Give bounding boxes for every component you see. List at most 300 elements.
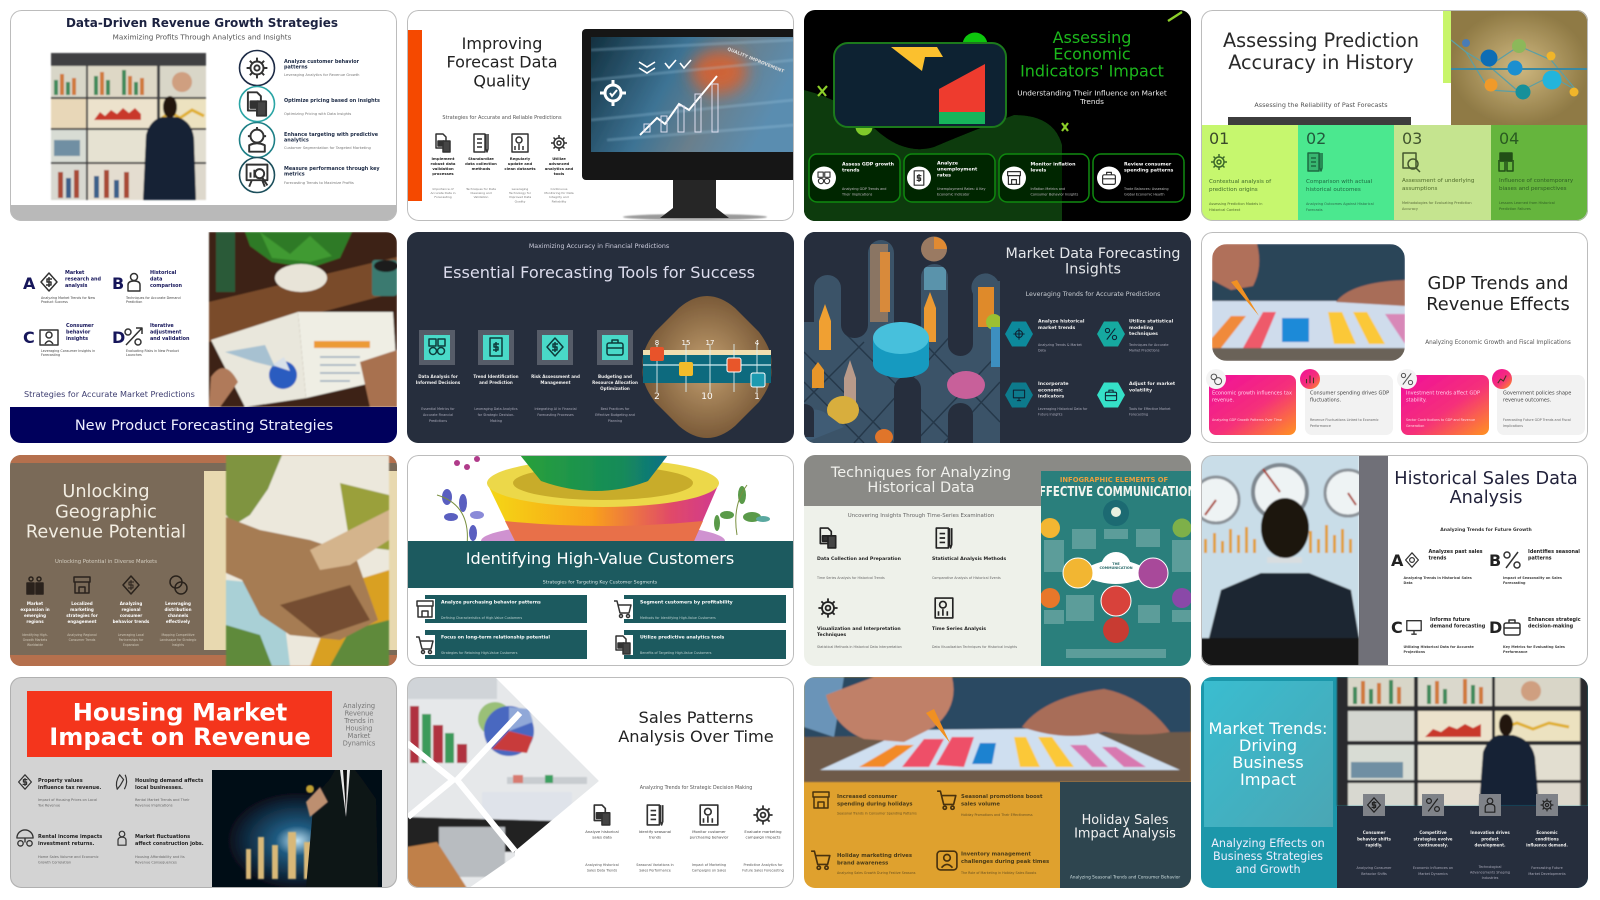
step labels: Standardize (468, 156, 494, 161)
item D: Performance (1503, 650, 1528, 654)
market notes: Worldwide (27, 643, 43, 647)
effect card 4: Government policies shape (1503, 390, 1571, 396)
indicator card 2 (904, 154, 995, 202)
title: Sales Patterns (639, 708, 753, 727)
hexagon photo: timeline on wood: 17 (706, 339, 714, 347)
action labels: Evaluate marketing (744, 829, 782, 834)
side subtitle: Trends in (343, 717, 374, 725)
column 03: 03 (1402, 129, 1422, 148)
column 01: 01 (1209, 129, 1229, 148)
step notes: Leveraging (512, 187, 528, 191)
title band: Identifying High-Value Customers (466, 549, 734, 568)
photo: handshake over world map (226, 455, 389, 666)
step notes: Validation (474, 195, 488, 199)
title tile: Business (1232, 753, 1304, 772)
side subtitle: Dynamics (343, 740, 376, 748)
item D: decision-making (1528, 624, 1574, 630)
item B (112, 270, 183, 304)
tool 2: and Prediction (479, 380, 513, 385)
icon: coins badge (1206, 369, 1226, 389)
panel: New Product Forecasting Strategies (10, 232, 398, 443)
insight 2 (1097, 318, 1174, 352)
photo: analyst facing chart wall (1337, 677, 1588, 806)
divider strip (1359, 455, 1388, 666)
icon: document dollar (907, 166, 931, 190)
icon: percent (1504, 552, 1520, 568)
title: Analysis (1450, 488, 1522, 508)
step labels: clean datasets (504, 166, 536, 171)
method 4: Time Series Analysis (932, 626, 986, 632)
title: Assessing (1053, 28, 1131, 47)
market notes: Partnerships for (119, 638, 144, 642)
tool 1: Essential Metrics for (421, 407, 455, 411)
action labels: sales data (592, 834, 612, 839)
holiday item 2: Seasonal promotions boost (961, 794, 1042, 800)
indicator card 3: Inflation Metrics and (1030, 187, 1065, 191)
icon: window chart (935, 598, 953, 618)
item A: Data (1404, 581, 1413, 585)
item D: Launches (126, 353, 142, 357)
market labels: strategies for (66, 613, 98, 618)
item A: A (23, 274, 36, 293)
list item 2: Optimize pricing based on insights (284, 98, 380, 104)
title: Quality (473, 71, 531, 90)
effect card 4: Forecasting Future GDP Trends and Fiscal (1503, 418, 1571, 422)
effect 4 (118, 831, 204, 864)
item C: C (23, 328, 35, 347)
photo: businessman with glowing city (212, 770, 382, 888)
indicator card 2: Unemployment Rates: A Key (937, 187, 985, 191)
icon: cart (613, 599, 633, 619)
tool 3: Management (540, 380, 571, 385)
icon tile: percent (1422, 794, 1444, 816)
item B: B (1489, 551, 1501, 570)
icon: dollar diamond (41, 273, 57, 291)
effect 3: Rental income impacts (38, 834, 102, 840)
item A (23, 270, 102, 304)
list item 3 (240, 122, 379, 158)
method 4 (932, 598, 1017, 649)
step notes: Techniques for Data (466, 187, 496, 191)
subtitle: Analyzing Trends for Strategic Decision Making (640, 785, 752, 791)
list item 2: Optimizing Pricing with Data Insights (284, 112, 351, 116)
subtitle: Strategies for Accurate and Reliable Predictions (442, 115, 562, 121)
market labels: engagement (67, 619, 97, 624)
item A: research and (65, 277, 102, 283)
subtitle: Analyzing Effects on (1211, 837, 1325, 850)
item C: demand forecasting (1430, 624, 1486, 630)
panel: Techniques for Analyzing Historical Data (804, 455, 1196, 666)
icon tile: person (1479, 794, 1501, 816)
hexagon photo: timeline on wood: 15 (682, 339, 690, 347)
icon: store (74, 577, 90, 593)
item B: Forecasting (1503, 581, 1526, 585)
subtitle: and Growth (1235, 863, 1301, 876)
title: Assessing Prediction (1223, 29, 1419, 52)
icon: document (436, 134, 450, 152)
method 1: Time Series Analysis for Historical Trends (816, 576, 885, 580)
market notes: Expansion (123, 643, 139, 647)
method 3: Statistical Methods in Historical Data Interpretation (817, 645, 902, 649)
title panel: Analyzing Seasonal Trends and Consumer Behavior (1070, 874, 1180, 880)
effect 2: Rental Market Trends and Their (135, 798, 190, 802)
indicator card 4: Review consumer (1124, 162, 1171, 168)
market labels: marketing (70, 607, 94, 612)
trend column 3: Technological (1479, 865, 1501, 869)
panel: Improving Forecast Data Quality (407, 10, 802, 221)
column 01 (1201, 125, 1298, 221)
sparkle marks (818, 12, 1182, 131)
icon: briefcase (1504, 620, 1520, 635)
trend column 1: Analyzing Consumer (1357, 866, 1391, 870)
tool 2: Leveraging Data Analytics (474, 407, 518, 411)
tool 3: Integrating AI in Financial (534, 407, 577, 411)
customer strategy 1: Defining Characteristics of High-Value Customers (441, 616, 522, 620)
item B: Impact of Seasonality on Sales (1503, 576, 1562, 580)
indicator card 4: Global Economic Health (1124, 193, 1165, 197)
trend column 4: Economic (1536, 830, 1558, 835)
photo: monitor: QUALITY IMPROVEMENT (726, 46, 786, 75)
action notes: Sales Performance (639, 868, 671, 872)
item B: data (150, 277, 162, 283)
trend column 2 (1413, 794, 1453, 876)
item B: Prediction (126, 300, 142, 304)
effect 4: Housing Affordability and Its (135, 855, 185, 859)
title band (10, 407, 397, 443)
title: Unlocking (62, 482, 150, 502)
embedded infographic: effective communication: COMMUNICATION (1099, 566, 1133, 570)
icon: teal hexagon percent (1097, 322, 1125, 346)
market notes: Leveraging Local (118, 633, 144, 637)
icon: briefcase (607, 340, 623, 355)
tool 3 (531, 330, 580, 417)
subtitle: Business Strategies (1213, 850, 1323, 863)
list item 3: Enhance targeting with predictive (284, 132, 378, 138)
method 1 (816, 528, 901, 580)
decorative green blob (804, 90, 1062, 221)
tool 3: Risk Assessment and (531, 374, 580, 379)
holiday item 1: spending during holidays (837, 802, 913, 808)
indicator card 4: Trade Balances: Assessing (1124, 187, 1169, 191)
item C: Leveraging Consumer Insights in (41, 349, 95, 353)
market labels: expansion in (20, 607, 50, 612)
customer strategy 3: Focus on long-term relationship potential (441, 634, 550, 640)
item B: Techniques for Accurate Demand (126, 296, 181, 300)
list item 4: metrics (284, 172, 305, 178)
step notes: Accurate Data in (430, 191, 456, 195)
step labels: data collection (465, 161, 497, 166)
market notes: Mapping Competitive (161, 633, 195, 637)
icon: gear person (1406, 553, 1418, 567)
list item 1: patterns (284, 65, 308, 71)
action labels: Monitor customer (692, 829, 726, 834)
holiday item 3: Analyzing Sales Growth During Festive Seasons (837, 871, 916, 875)
subtitle: Maximizing Profits Through Analytics and Insights (113, 32, 292, 42)
tool 1: Predictions (429, 419, 447, 423)
effect 3: Home Sales Volume and Economic (38, 855, 99, 859)
column 03 (1394, 125, 1491, 221)
hexagon photo: timeline on wood: 8 (655, 339, 659, 347)
icon: cart (811, 851, 830, 869)
list item 1: Analyze customer behavior (284, 59, 359, 65)
subtitle: Unlocking Potential in Diverse Markets (55, 559, 157, 565)
indicator card 1 (809, 154, 900, 202)
subtitle: Understanding Their Influence on Market (1017, 88, 1167, 98)
title box: Impact on Revenue (49, 723, 311, 751)
action labels: Analyze historical (585, 829, 619, 834)
icon: document and calculator (240, 86, 274, 122)
item B: B (112, 274, 124, 293)
title tile (1204, 681, 1333, 827)
step notes: Integrity and (549, 195, 569, 199)
title: Revenue Effects (1426, 294, 1570, 315)
item D: Key Metrics for Evaluating Sales (1503, 645, 1565, 649)
photo: 3D market objects seen through pill cut-outs (804, 232, 1002, 445)
market notes: Growth Markets (23, 638, 48, 642)
insight 3 (1005, 381, 1088, 416)
icon: people group (27, 577, 43, 594)
tool 4: Optimization (600, 386, 630, 391)
icon: document (820, 528, 836, 548)
tool 4: Resource Allocation (592, 380, 638, 385)
effect 1: influence tax revenue. (38, 785, 101, 791)
insight 4: Tools for Effective Market (1129, 407, 1171, 411)
hexagon photo: timeline on wood: 1 (754, 392, 760, 402)
icon: percent badge (1397, 369, 1417, 389)
trend column 3: product (1481, 836, 1499, 841)
holiday item 2 (937, 791, 1043, 817)
item C: Projections (1404, 650, 1425, 654)
icon: cart (937, 791, 956, 809)
item D: adjustment (150, 330, 182, 336)
column 01: Contextual analysis of (1209, 179, 1271, 185)
title: Insights (1065, 261, 1121, 277)
tool 2 (473, 330, 519, 423)
market labels: Analyzing (120, 601, 142, 606)
action labels: campaign impacts (746, 834, 781, 839)
item C: Forecasting (41, 353, 60, 357)
trend column 1: Behavior Shifts (1361, 872, 1387, 876)
accent bar (407, 30, 422, 201)
market labels: Localized (71, 601, 93, 606)
bottom band (10, 655, 397, 666)
market labels: consumer (120, 613, 142, 618)
icon: umbrella (17, 830, 33, 846)
market labels: channels (168, 613, 189, 618)
effect card 2: Revenue Fluctuations Linked to Economic (1310, 418, 1379, 422)
indicator card 3 (999, 154, 1089, 202)
item D (112, 323, 190, 357)
item A: analysis (65, 283, 88, 289)
effect 1: Property values (38, 778, 83, 784)
step labels: methods (472, 166, 491, 171)
column 04: Influence of contemporary (1499, 178, 1573, 184)
icon: briefcase (1097, 166, 1121, 190)
indicator card 2: unemployment (937, 166, 978, 172)
panel: Housing Market Impact on Revenue (10, 677, 397, 888)
title: Essential Forecasting Tools for Success (443, 263, 755, 282)
list item 4: Measure performance through key (284, 166, 380, 172)
action labels: purchasing behavior (690, 834, 729, 839)
effect 1 (19, 775, 101, 808)
step labels: validation (432, 166, 454, 171)
action labels: trends (649, 834, 661, 839)
insight 4 (1097, 381, 1176, 416)
item C: C (1391, 618, 1403, 637)
trend column 1: rapidly. (1366, 843, 1383, 848)
tool 4: Planning (608, 419, 622, 423)
icon: window chart (512, 134, 528, 152)
trend column 3: Industries (1482, 876, 1499, 880)
insight 4: volatility (1129, 387, 1152, 393)
column 02: 02 (1306, 129, 1326, 148)
side subtitle: Revenue (345, 710, 373, 718)
insight 1: Analyze historical (1038, 320, 1085, 324)
indicator card 2: rates (937, 172, 951, 178)
effect 3: investment returns. (38, 841, 94, 847)
icon: gear person (240, 122, 274, 158)
market notes: Insights (172, 643, 184, 647)
effect card 1: Economic growth influences tax (1212, 390, 1292, 396)
list item 4 (240, 158, 380, 192)
column 03: Methodologies for Evaluating Prediction (1402, 201, 1472, 205)
holiday item 3: Holiday marketing drives (837, 853, 912, 859)
insight 3: Leveraging Historical Data for (1038, 407, 1087, 411)
icon: notebook (936, 528, 952, 548)
step labels: update and (508, 161, 532, 166)
list item 1 (240, 50, 360, 86)
step notes: Monitoring for Data (544, 191, 574, 195)
item D (1489, 617, 1581, 654)
method 3: Visualization and Interpretation (817, 627, 901, 632)
subtitle: Analyzing Trends for Future Growth (1440, 527, 1532, 533)
item D: Enhances strategic (1528, 617, 1581, 623)
column 01: prediction origins (1209, 187, 1258, 193)
side subtitle: Market (348, 732, 371, 740)
indicator card 3: Monitor inflation (1030, 162, 1075, 168)
effect card 2: fluctuations. (1310, 398, 1341, 404)
trend column 2: strategies evolve (1413, 836, 1453, 841)
effect card 3: Investment trends affect GDP (1406, 390, 1480, 396)
icon tile: gear (1536, 794, 1558, 816)
tool 1: Informed Decisions (416, 380, 461, 385)
step labels: Regularly (510, 156, 530, 161)
insight 2: modeling (1129, 325, 1153, 331)
trend column 3: Advancements Shaping (1470, 870, 1510, 874)
trend column 4: conditions (1535, 836, 1559, 841)
column 01: Historical Context (1209, 208, 1241, 212)
item D: D (112, 328, 125, 347)
icon: store (1002, 166, 1026, 190)
effect card 3: Generation (1406, 424, 1424, 428)
icon row (436, 134, 567, 152)
step labels: advanced (549, 161, 570, 166)
column 03: Assessment of underlying (1402, 178, 1474, 184)
step notes: Quality (515, 199, 526, 203)
trend column 2: Competitive (1419, 830, 1447, 835)
dark footer panel (1337, 806, 1588, 888)
icon: gear head (240, 50, 274, 86)
footer bar (10, 205, 397, 221)
column 04: 04 (1499, 129, 1519, 148)
subtitle: Analyzing Economic Growth and Fiscal Implications (1425, 340, 1571, 346)
photo: monitor (582, 29, 802, 220)
customer strategy 2: Segment customers by profitability (640, 600, 733, 606)
effect 1: Impact of Housing Prices on Local (38, 798, 97, 802)
subtitle: Leveraging Trends for Accurate Predictions (1026, 291, 1160, 298)
item A: trends (1428, 556, 1447, 562)
icon: screen (1407, 621, 1421, 634)
tool 4: Effective Budgeting and (595, 413, 635, 417)
market labels: regional (121, 607, 141, 612)
icon: gear (551, 135, 567, 151)
market labels: regions (26, 619, 44, 624)
insight 3: Future Insights (1038, 412, 1063, 416)
side subtitle: Housing (346, 724, 372, 732)
trend column 4: Market Developments (1528, 872, 1566, 876)
action notes: Sales Data Trends (587, 868, 617, 872)
icon: magnifier report (1403, 153, 1420, 172)
indicator card 1: Analyzing GDP Trends and (842, 187, 886, 191)
effect 2 (116, 775, 203, 808)
holiday item 3 (811, 851, 916, 875)
holiday item 4 (937, 851, 1049, 875)
title: Market Data Forecasting (1006, 246, 1180, 262)
effect card 2: Performance (1310, 424, 1331, 428)
action labels: Identify seasonal (639, 829, 671, 834)
effect card 4: revenue outcomes. (1503, 398, 1552, 404)
icon: document (594, 805, 610, 825)
item C: Consumer (66, 323, 94, 329)
photo: hands over bar chart (804, 677, 1191, 782)
market labels: Leveraging (165, 601, 191, 606)
customer strategy 1 (415, 595, 587, 623)
holiday item 4: The Role of Marketing in Holiday Sales Boosts (960, 871, 1037, 875)
method 3 (817, 598, 902, 649)
item A: Analyzing Market Trends for New (41, 296, 95, 300)
indicator card 4 (1093, 154, 1184, 202)
trend column 1: behavior shifts (1357, 836, 1392, 841)
effect card 3 (1397, 369, 1489, 435)
title: Analysis Over Time (618, 727, 774, 746)
icon: presentation magnifier (240, 158, 274, 192)
action notes: Seasonal Variations in (636, 863, 674, 867)
item B: Identifies seasonal (1528, 549, 1580, 555)
photo: desk with notebook and plant (209, 232, 398, 407)
icon: gear (753, 805, 773, 825)
sales icons (594, 805, 773, 825)
hexagon photo: timeline on wood (642, 296, 772, 438)
trend column 3: development. (1474, 843, 1506, 848)
photo: dashboard monitor in diamond tiles (407, 677, 599, 888)
title band (804, 455, 1191, 506)
title band: Strategies for Targeting Key Customer Segments (543, 580, 658, 586)
market icons (27, 576, 187, 594)
insight 2: Market Predictions (1129, 348, 1160, 352)
icon: person frame (40, 330, 58, 345)
title: Forecast Data (446, 53, 558, 72)
tool 4: Best Practices for (601, 407, 629, 411)
holiday item 2: sales volume (961, 802, 1000, 808)
action labels (585, 829, 782, 839)
embedded infographic: effective communication: INFOGRAPHIC ELEMENTS OF (1060, 476, 1169, 484)
market notes: Landscape for Strategic (160, 638, 197, 642)
title band: Historical Data (867, 480, 975, 496)
hexagon photo: timeline on wood: 4 (755, 339, 760, 347)
market notes: Identifying High- (22, 633, 48, 637)
photo: hand marking bar chart (1212, 244, 1405, 361)
method 2: Comparative Analysis of Historical Events (932, 576, 1001, 580)
